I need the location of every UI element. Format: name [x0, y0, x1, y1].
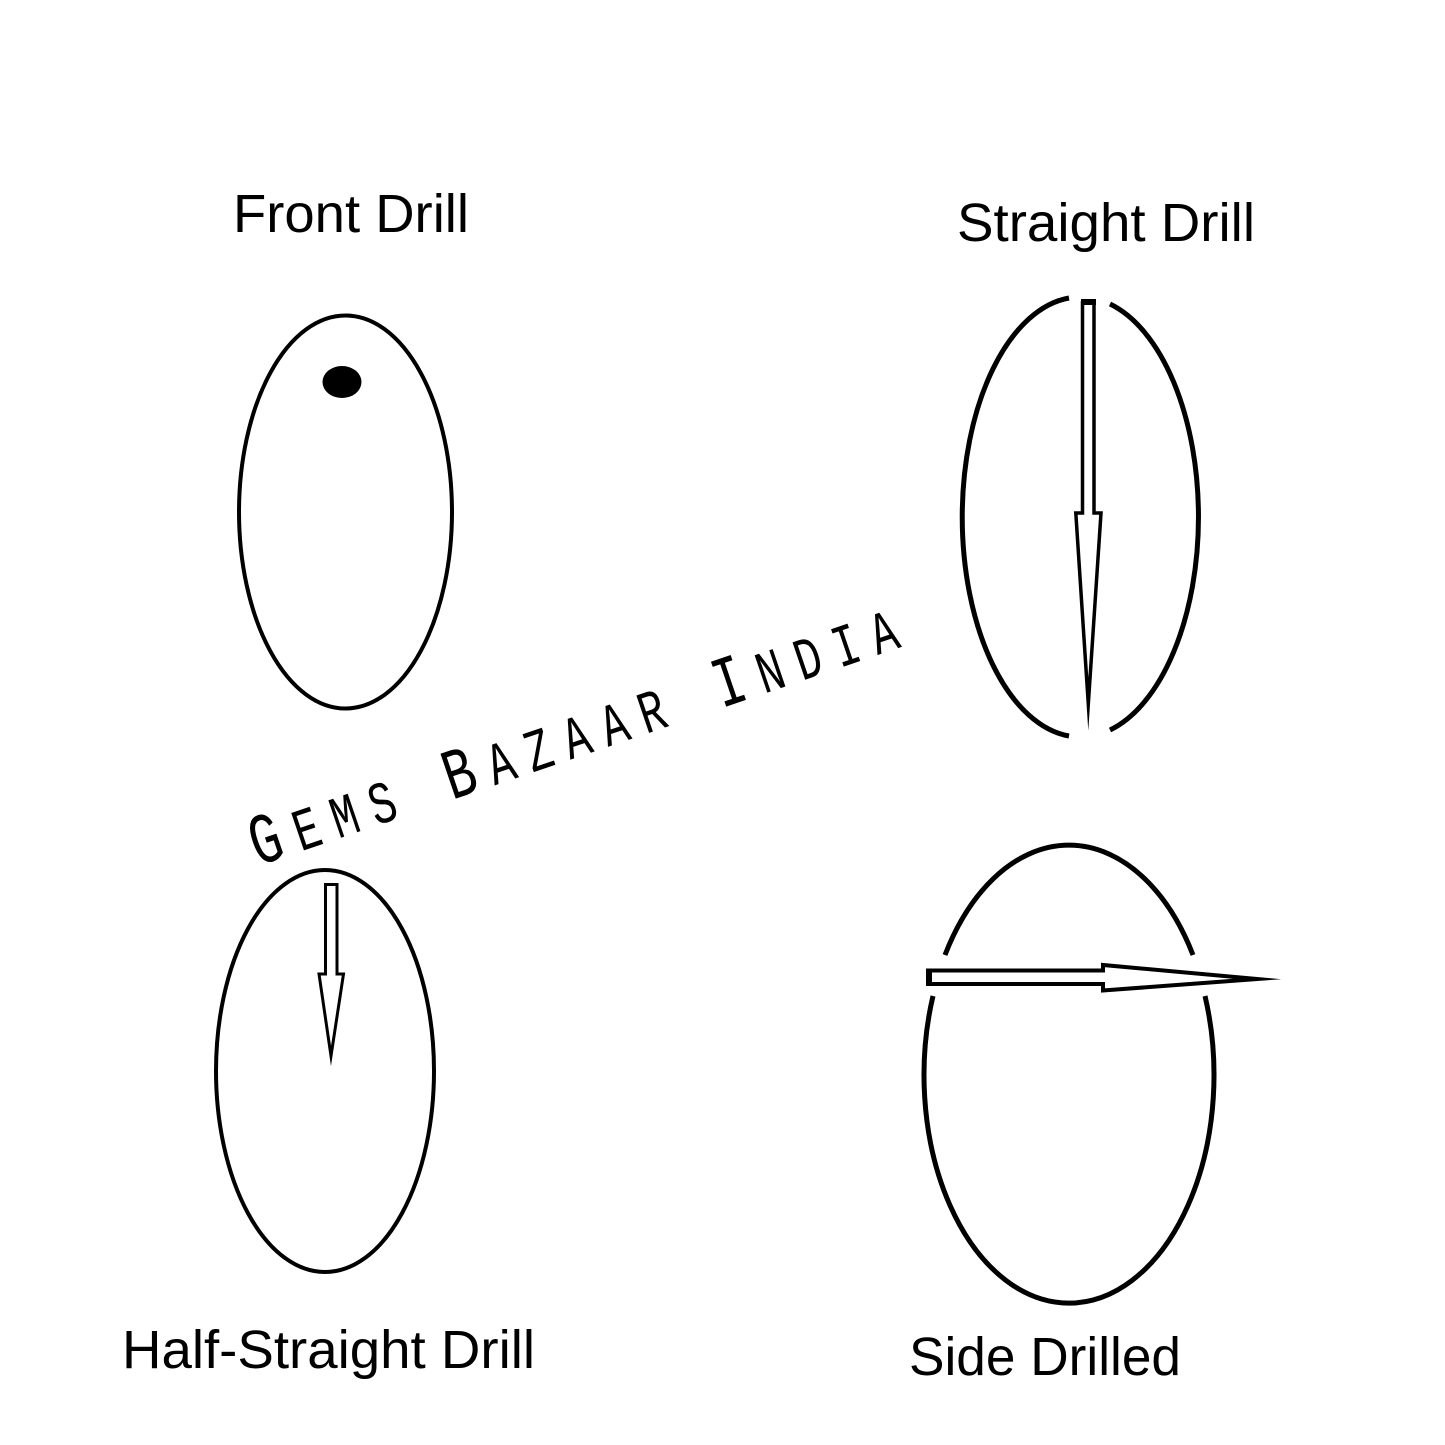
panel: side drilled — [909, 845, 1257, 1387]
arrow: straight drill vertical — [1076, 303, 1101, 704]
heading: Side Drilled: Side Drilled — [909, 1327, 1181, 1387]
panel: straight drill — [957, 193, 1255, 736]
panel: front drill — [233, 184, 469, 708]
heading: Straight Drill: Straight Drill — [957, 193, 1255, 253]
icon: drill hole — [322, 366, 362, 398]
icon: front drill oval — [239, 316, 452, 708]
heading: Half-Straight Drill: Half-Straight Drill — [122, 1320, 535, 1380]
icon: straight drill oval arcs — [962, 298, 1198, 736]
watermark: Gems Bazaar India: GEMS BAZAAR INDIA — [239, 590, 910, 887]
panel: half-straight drill — [122, 870, 535, 1380]
heading: Front Drill: Front Drill — [233, 184, 469, 244]
arrow: side drill horizontal — [928, 965, 1257, 990]
icon: side drilled oval arcs — [924, 845, 1214, 1303]
icon: half-straight drill oval — [216, 870, 434, 1272]
arrow: half-straight drill — [319, 884, 344, 1056]
